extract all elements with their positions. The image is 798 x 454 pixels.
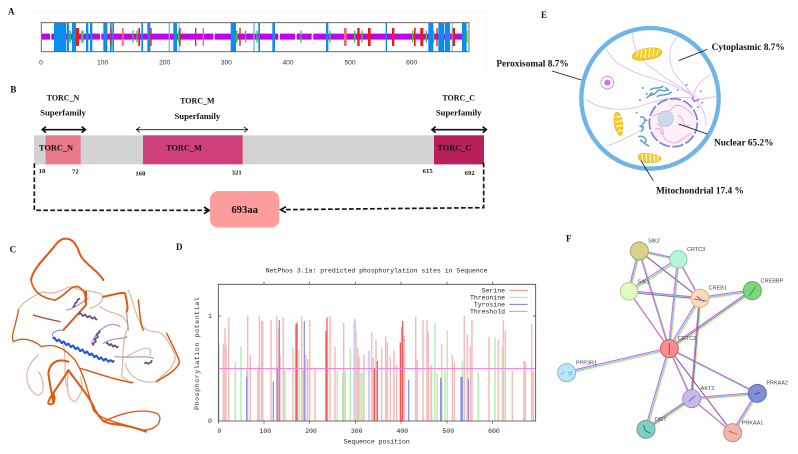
x axis labels: 300 bbox=[351, 428, 363, 435]
node: CREB1 bbox=[691, 286, 727, 307]
y axis labels bbox=[208, 313, 212, 425]
purple helices bbox=[73, 299, 152, 364]
panel B: domain architecture bbox=[10, 85, 486, 228]
red marks bbox=[76, 28, 455, 46]
connector arrowheads bbox=[204, 207, 286, 214]
axis labels: 0 bbox=[39, 59, 43, 66]
x axis labels: 0 bbox=[217, 428, 221, 435]
superfamily labels: Superfamily bbox=[174, 111, 221, 121]
location labels: Cytoplasmic 8.7% bbox=[712, 43, 785, 53]
domain labels: TORC_C bbox=[437, 144, 471, 153]
node: OGT bbox=[637, 417, 667, 438]
node: OGT: OGT bbox=[655, 417, 667, 423]
position numbers: 692 bbox=[465, 170, 475, 177]
position numbers: 615 bbox=[423, 168, 433, 175]
icon: mitochondrion top bbox=[632, 48, 662, 60]
axis labels: 100 bbox=[97, 59, 109, 66]
node: PPP3R1 bbox=[558, 360, 597, 382]
length box: 693aa bbox=[210, 191, 279, 228]
y axis labels: 0 bbox=[208, 418, 212, 425]
node: PPP3R1: PPP3R1 bbox=[576, 360, 597, 366]
x axis labels: 200 bbox=[305, 428, 317, 435]
cell membrane bbox=[581, 28, 719, 169]
domain labels: TORC_M bbox=[166, 144, 202, 153]
position numbers: 72 bbox=[72, 169, 79, 176]
node: PRKAA1 bbox=[724, 420, 763, 442]
icon: vesicle bbox=[601, 76, 614, 89]
axis labels: 500 bbox=[344, 59, 356, 66]
x axis labels bbox=[217, 428, 500, 435]
superfamily labels: TORC_M bbox=[180, 97, 215, 106]
node: CRTC2 bbox=[660, 336, 696, 358]
node: CRTC3: CRTC3 bbox=[687, 247, 705, 253]
superfamily labels bbox=[40, 93, 482, 121]
superfamily labels: Superfamily bbox=[40, 107, 87, 117]
blue helix bbox=[53, 338, 114, 362]
light blue bands bbox=[169, 23, 453, 52]
icon: golgi and reticulum bbox=[638, 86, 672, 146]
panel D: phosphorylation chart: Phosphorylation potential bbox=[193, 297, 201, 410]
serine bars bbox=[223, 315, 533, 421]
threshold line bbox=[218, 367, 536, 370]
node: SIK2 bbox=[630, 239, 660, 260]
superfamily labels: Superfamily bbox=[436, 107, 482, 117]
location labels: Mitochondrial 17.4 % bbox=[656, 187, 744, 197]
x axis labels: 100 bbox=[259, 428, 271, 435]
node: CREBBP bbox=[743, 278, 784, 300]
dashed connectors bbox=[34, 163, 484, 210]
node: PRKAA2: PRKAA2 bbox=[766, 380, 788, 386]
superfamily labels: TORC_N bbox=[47, 93, 80, 102]
axis labels: 600 bbox=[406, 59, 418, 66]
heading: E: E bbox=[541, 10, 547, 20]
thin coil bbox=[18, 287, 175, 402]
heading: F: F bbox=[566, 233, 572, 243]
heading: A: A bbox=[8, 6, 15, 16]
heading: D: D bbox=[176, 242, 183, 252]
chart frame bbox=[218, 284, 536, 421]
domain: TORC_N bbox=[46, 135, 81, 164]
position numbers: 168 bbox=[135, 170, 146, 177]
icon: mitochondrion bottom bbox=[638, 153, 661, 163]
panel A: domain track bbox=[8, 6, 487, 70]
green marks bbox=[69, 31, 468, 43]
dark evidence edges bbox=[629, 251, 752, 433]
position numbers: 321 bbox=[232, 170, 242, 177]
purple sequence bar bbox=[42, 34, 467, 40]
node: CREBBP: CREBBP bbox=[761, 278, 784, 284]
legend: Tyrosine bbox=[474, 302, 505, 309]
panel F: interaction network bbox=[558, 233, 788, 442]
domain labels: TORC_N bbox=[39, 144, 73, 153]
legend: Serine bbox=[482, 287, 505, 294]
heading: C: C bbox=[10, 244, 16, 254]
location labels: Peroxisomal 8.7% bbox=[496, 59, 569, 69]
network edges bbox=[566, 250, 758, 434]
pale tyrosine bars bbox=[355, 319, 369, 421]
orange ribbons bbox=[31, 239, 103, 280]
panel B: domain architecture: 693aa bbox=[231, 205, 259, 216]
node: AKT2 bbox=[683, 386, 714, 408]
domain: TORC_C bbox=[434, 135, 484, 164]
node: PRKAA2 bbox=[748, 380, 788, 402]
light red marks bbox=[122, 28, 347, 46]
axis labels: 200 bbox=[159, 59, 171, 66]
node: SIK2: SIK2 bbox=[648, 239, 660, 245]
heading: B: B bbox=[10, 85, 16, 95]
legend bbox=[470, 287, 528, 316]
panel D: phosphorylation chart bbox=[176, 242, 536, 446]
panel C: 3D protein structure bbox=[10, 239, 179, 432]
axis labels bbox=[39, 59, 418, 66]
domain: TORC_M bbox=[143, 135, 243, 164]
position numbers bbox=[39, 168, 475, 177]
leader lines bbox=[552, 49, 707, 181]
x axis labels: 500 bbox=[442, 428, 454, 435]
endoplasmic filaments bbox=[586, 33, 717, 146]
icon: mitochondrion left bbox=[614, 112, 623, 135]
protein bar bbox=[34, 135, 484, 164]
legend: Threshold bbox=[470, 309, 505, 316]
axis labels: 300 bbox=[221, 59, 232, 66]
location labels: Nuclear 65.2% bbox=[714, 139, 773, 149]
domain labels bbox=[39, 144, 471, 153]
tyrosine bars bbox=[247, 320, 468, 421]
y axis labels: 1 bbox=[208, 313, 212, 320]
axis titles: Sequence position bbox=[344, 439, 410, 446]
node: CREB1: CREB1 bbox=[709, 286, 727, 292]
purple coil bbox=[67, 298, 153, 358]
node: CRTC2: CRTC2 bbox=[678, 336, 696, 342]
icon: nucleus bbox=[649, 99, 697, 147]
panel E: subcellular localisation bbox=[496, 10, 785, 197]
node: PRKAA1: PRKAA1 bbox=[742, 420, 763, 426]
legend: Threonine bbox=[470, 295, 505, 302]
location labels bbox=[496, 43, 785, 197]
threonine bars bbox=[219, 322, 502, 421]
blue evidence edges bbox=[629, 251, 757, 433]
node: SIK1 bbox=[620, 279, 650, 300]
range arrows bbox=[42, 127, 486, 133]
axis ticks bbox=[218, 282, 536, 424]
strong serine bars bbox=[296, 318, 403, 421]
track frame bbox=[41, 23, 469, 52]
chart title: NetPhos 3.1a: predicted phosphorylation sites in Sequence bbox=[266, 268, 488, 275]
icon: small vesicles bbox=[636, 84, 703, 114]
blue bands bbox=[54, 23, 467, 52]
x axis labels: 600 bbox=[488, 428, 500, 435]
node: AKT2: AKT2 bbox=[701, 386, 714, 392]
superfamily labels: TORC_C bbox=[442, 93, 475, 102]
icon: centrosome bbox=[692, 97, 699, 101]
axis labels: 400 bbox=[282, 59, 294, 66]
node: CRTC3 bbox=[670, 247, 705, 268]
x axis labels: 400 bbox=[396, 428, 408, 435]
node: SIK1: SIK1 bbox=[638, 279, 650, 285]
position numbers: 18 bbox=[39, 168, 46, 175]
